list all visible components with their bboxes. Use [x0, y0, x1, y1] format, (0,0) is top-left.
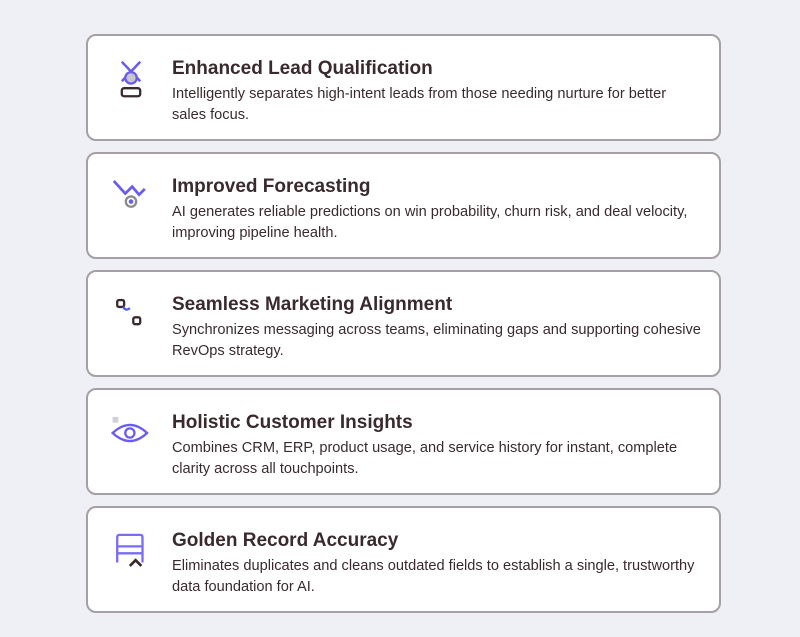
icon: eye: [111, 416, 149, 442]
card: golden record: [86, 506, 721, 613]
text: AI generates reliable predictions on win probability, churn risk, and deal velocity, improving pipeline health.: [172, 204, 687, 241]
card: forecasting: [86, 152, 721, 259]
icon: trend line: [112, 180, 146, 208]
title: Improved Forecasting: [172, 176, 370, 197]
icon: funnel: [120, 60, 142, 98]
card: lead qualification: [86, 34, 721, 141]
title: Seamless Marketing Alignment: [172, 294, 452, 315]
card: marketing alignment: [86, 270, 721, 377]
title: Holistic Customer Insights: [172, 412, 413, 433]
title: Enhanced Lead Qualification: [172, 58, 433, 79]
icon: linked nodes: [116, 298, 142, 326]
card: customer insights: [86, 388, 721, 495]
text: Intelligently separates high-intent leads from those needing nurture for better sales focus.: [172, 86, 666, 123]
text: Eliminates duplicates and cleans outdated fields to establish a single, trustworthy data foundation for AI.: [172, 558, 694, 595]
text: Synchronizes messaging across teams, eliminating gaps and supporting cohesive RevOps strategy.: [172, 322, 701, 359]
title: Golden Record Accuracy: [172, 530, 398, 551]
text: Combines CRM, ERP, product usage, and service history for instant, complete clarity across all touchpoints.: [172, 440, 677, 477]
icon: record: [116, 534, 144, 567]
